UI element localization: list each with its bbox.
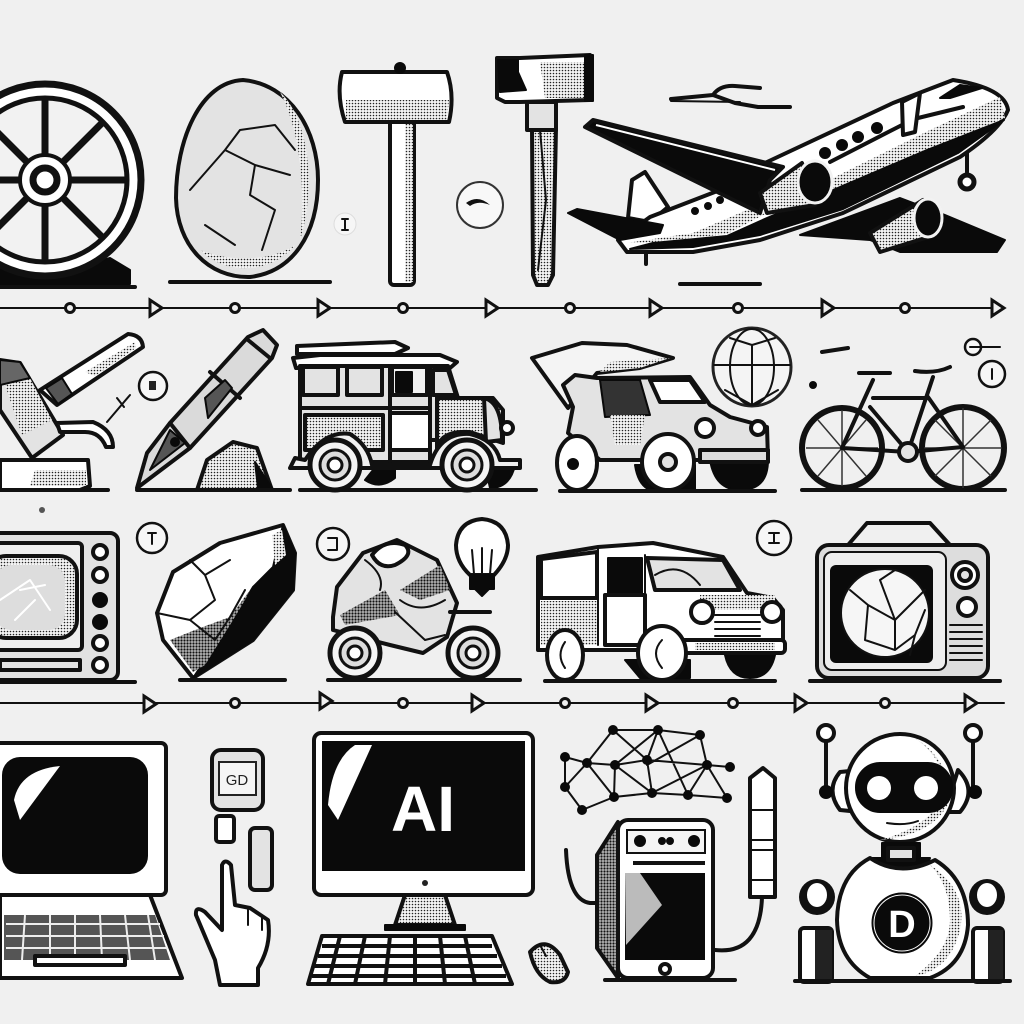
icon: rock [170,80,330,282]
icon: retro tv with globe [810,523,1000,681]
icon: light bulb [456,519,508,596]
icon: mouse [530,944,568,982]
icon: vintage jeep [290,342,536,490]
icon: robot [795,725,1010,982]
icon: small flying plane [671,86,790,107]
icon: retro computer [0,743,182,978]
icon: phone device with probe [566,768,775,980]
icon: hammer two [497,55,593,285]
icon: pen [137,330,290,490]
icon: small device [212,750,272,890]
icon: globe [713,328,791,406]
small marker [317,528,349,560]
small dot [39,507,45,513]
icon: network [561,726,734,814]
icon: hammer one [340,63,452,285]
label: AI: AI [391,773,455,845]
icon: old tv left [0,533,135,682]
icon: wagon wheel [0,84,141,287]
icon: hand pointing [196,862,269,985]
icon: robot: D [888,904,916,946]
small marker [757,521,791,555]
icon: gavel [0,334,167,490]
icon: rock on wheels [328,540,520,680]
small circle marker [334,213,356,235]
icon: airplane [568,80,1008,284]
small marks near bicycle [810,339,1005,388]
icon: small device: GD [226,772,248,789]
icon: keyboard [308,936,512,984]
icon: desktop monitor with AI [314,733,533,930]
icon: bicycle [802,367,1005,490]
timeline row one [0,300,1004,316]
icon: delivery van [538,543,785,681]
small marker [137,523,167,553]
icon: faceted rock [157,525,295,680]
icon: open top car [532,343,775,491]
timeline row two [0,693,1004,712]
small circle marker with dot [457,182,503,228]
